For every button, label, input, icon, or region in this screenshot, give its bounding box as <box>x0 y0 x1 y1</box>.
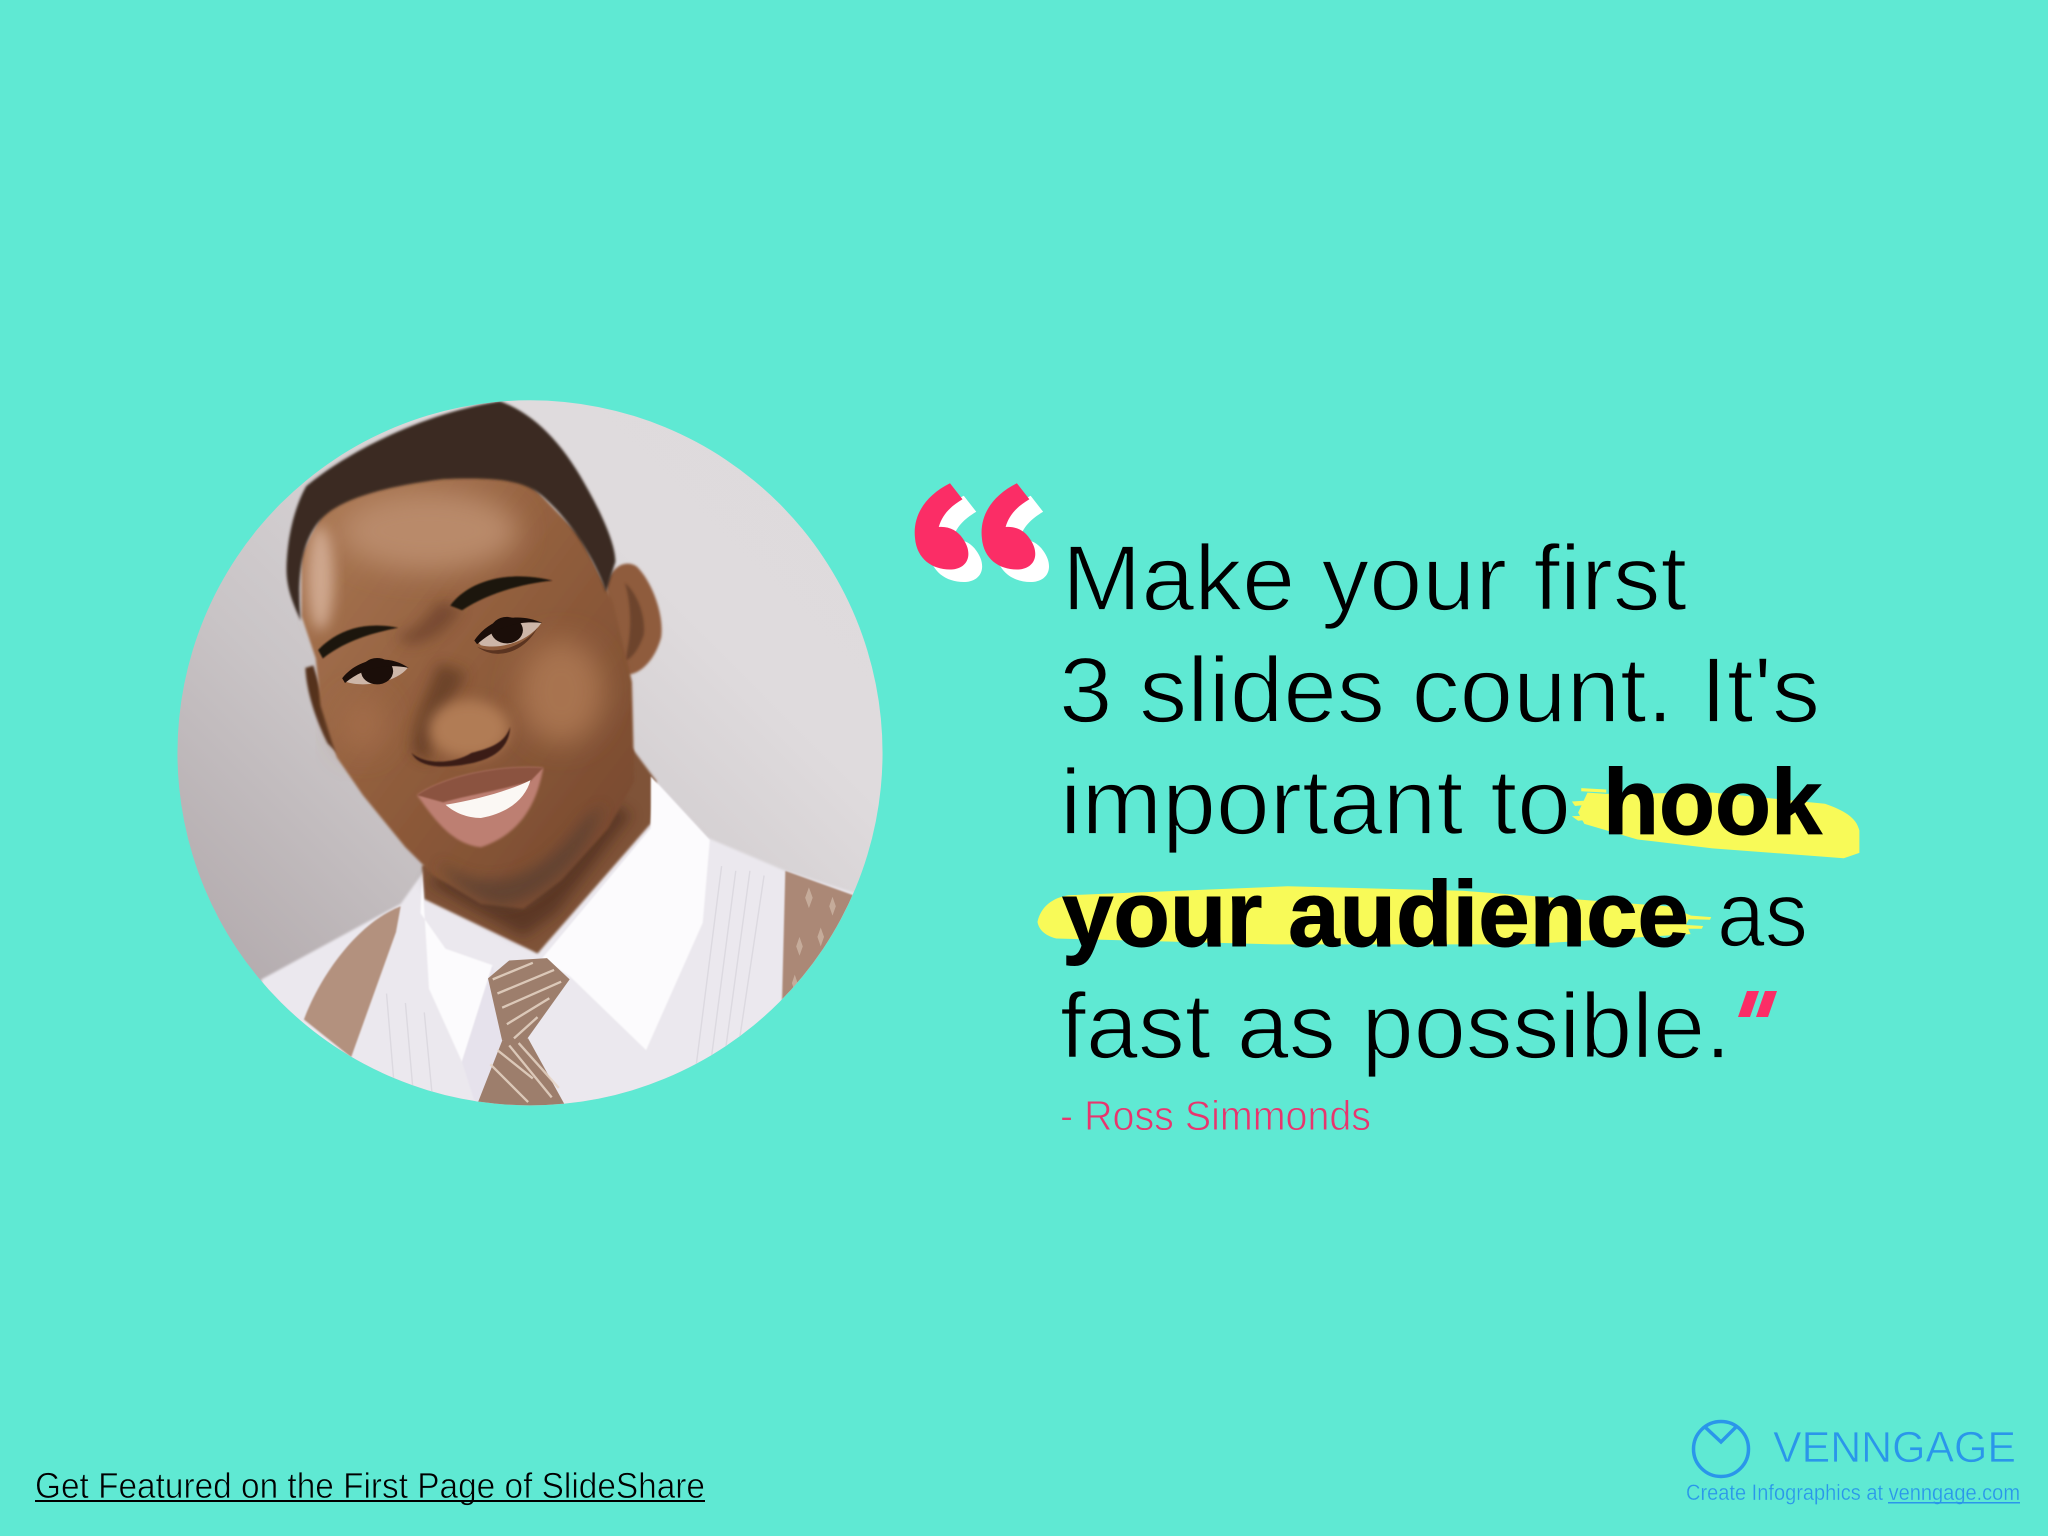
under-chin shadow <box>424 805 632 937</box>
left suspender <box>304 906 401 1057</box>
left cheek highlight <box>339 696 387 753</box>
quote text <box>1059 526 1822 1078</box>
line 4 regular: as <box>1717 862 1808 966</box>
face <box>302 472 634 909</box>
temple highlight <box>307 526 334 630</box>
neck <box>422 748 656 953</box>
right suspender <box>782 871 854 1001</box>
nostril shadow <box>412 727 510 767</box>
venngage tagline: Create Infographics at venngage.com <box>1686 1480 2020 1505</box>
photo backdrop <box>160 380 900 1120</box>
forehead highlight <box>339 491 519 571</box>
venngage wordmark: VENNGAGE <box>1773 1423 2016 1472</box>
line 2: 3 slides count. It's <box>1059 638 1820 742</box>
shirt placket <box>464 971 492 1102</box>
attribution: - Ross Simmonds <box>1060 1092 1371 1139</box>
teeth <box>446 780 530 818</box>
right suspender pattern <box>792 887 836 992</box>
left eyebrow <box>318 626 398 658</box>
tie knot <box>488 958 570 1041</box>
portrait photo: smiling man <box>160 380 900 1120</box>
line 5: fast as possible. <box>1060 974 1731 1078</box>
line 3 bold hook: hook <box>1603 750 1822 854</box>
lips <box>417 767 543 847</box>
shirt stripes <box>387 866 764 1112</box>
upper lip <box>417 767 543 802</box>
white shadow marks <box>928 496 1049 582</box>
line 4 bold your audience: your audience <box>1062 862 1689 966</box>
nose <box>429 700 509 758</box>
line 1: Make your first <box>1062 526 1687 630</box>
left eye <box>342 658 409 684</box>
nose bridge shadow <box>412 663 467 762</box>
hair <box>286 401 615 621</box>
line 3 regular: important to <box>1060 750 1571 854</box>
stubble <box>438 805 604 906</box>
left ear <box>305 666 342 758</box>
right ear <box>606 564 662 675</box>
brow shadow <box>396 602 462 644</box>
cheek highlight <box>519 640 604 743</box>
left collar <box>421 871 493 1062</box>
venngage logo icon <box>1694 1422 1748 1476</box>
highlight stroke: your audience <box>1038 886 1711 944</box>
shirt <box>260 823 854 1106</box>
closing quotation mark <box>1738 991 1777 1017</box>
tie blade <box>476 1038 566 1107</box>
right collar <box>542 776 710 1050</box>
ear inner shadow <box>625 583 644 661</box>
link: Get Featured on the First Page of SlideShare: Get Featured on the First Page of SlideShare <box>35 1465 705 1506</box>
tie stripes <box>490 963 561 1102</box>
highlight stroke: hook <box>1572 788 1859 858</box>
opening quotation mark icon <box>915 483 1049 582</box>
pink marks <box>915 483 1035 569</box>
right eye <box>474 617 542 654</box>
right eyebrow <box>450 576 553 610</box>
